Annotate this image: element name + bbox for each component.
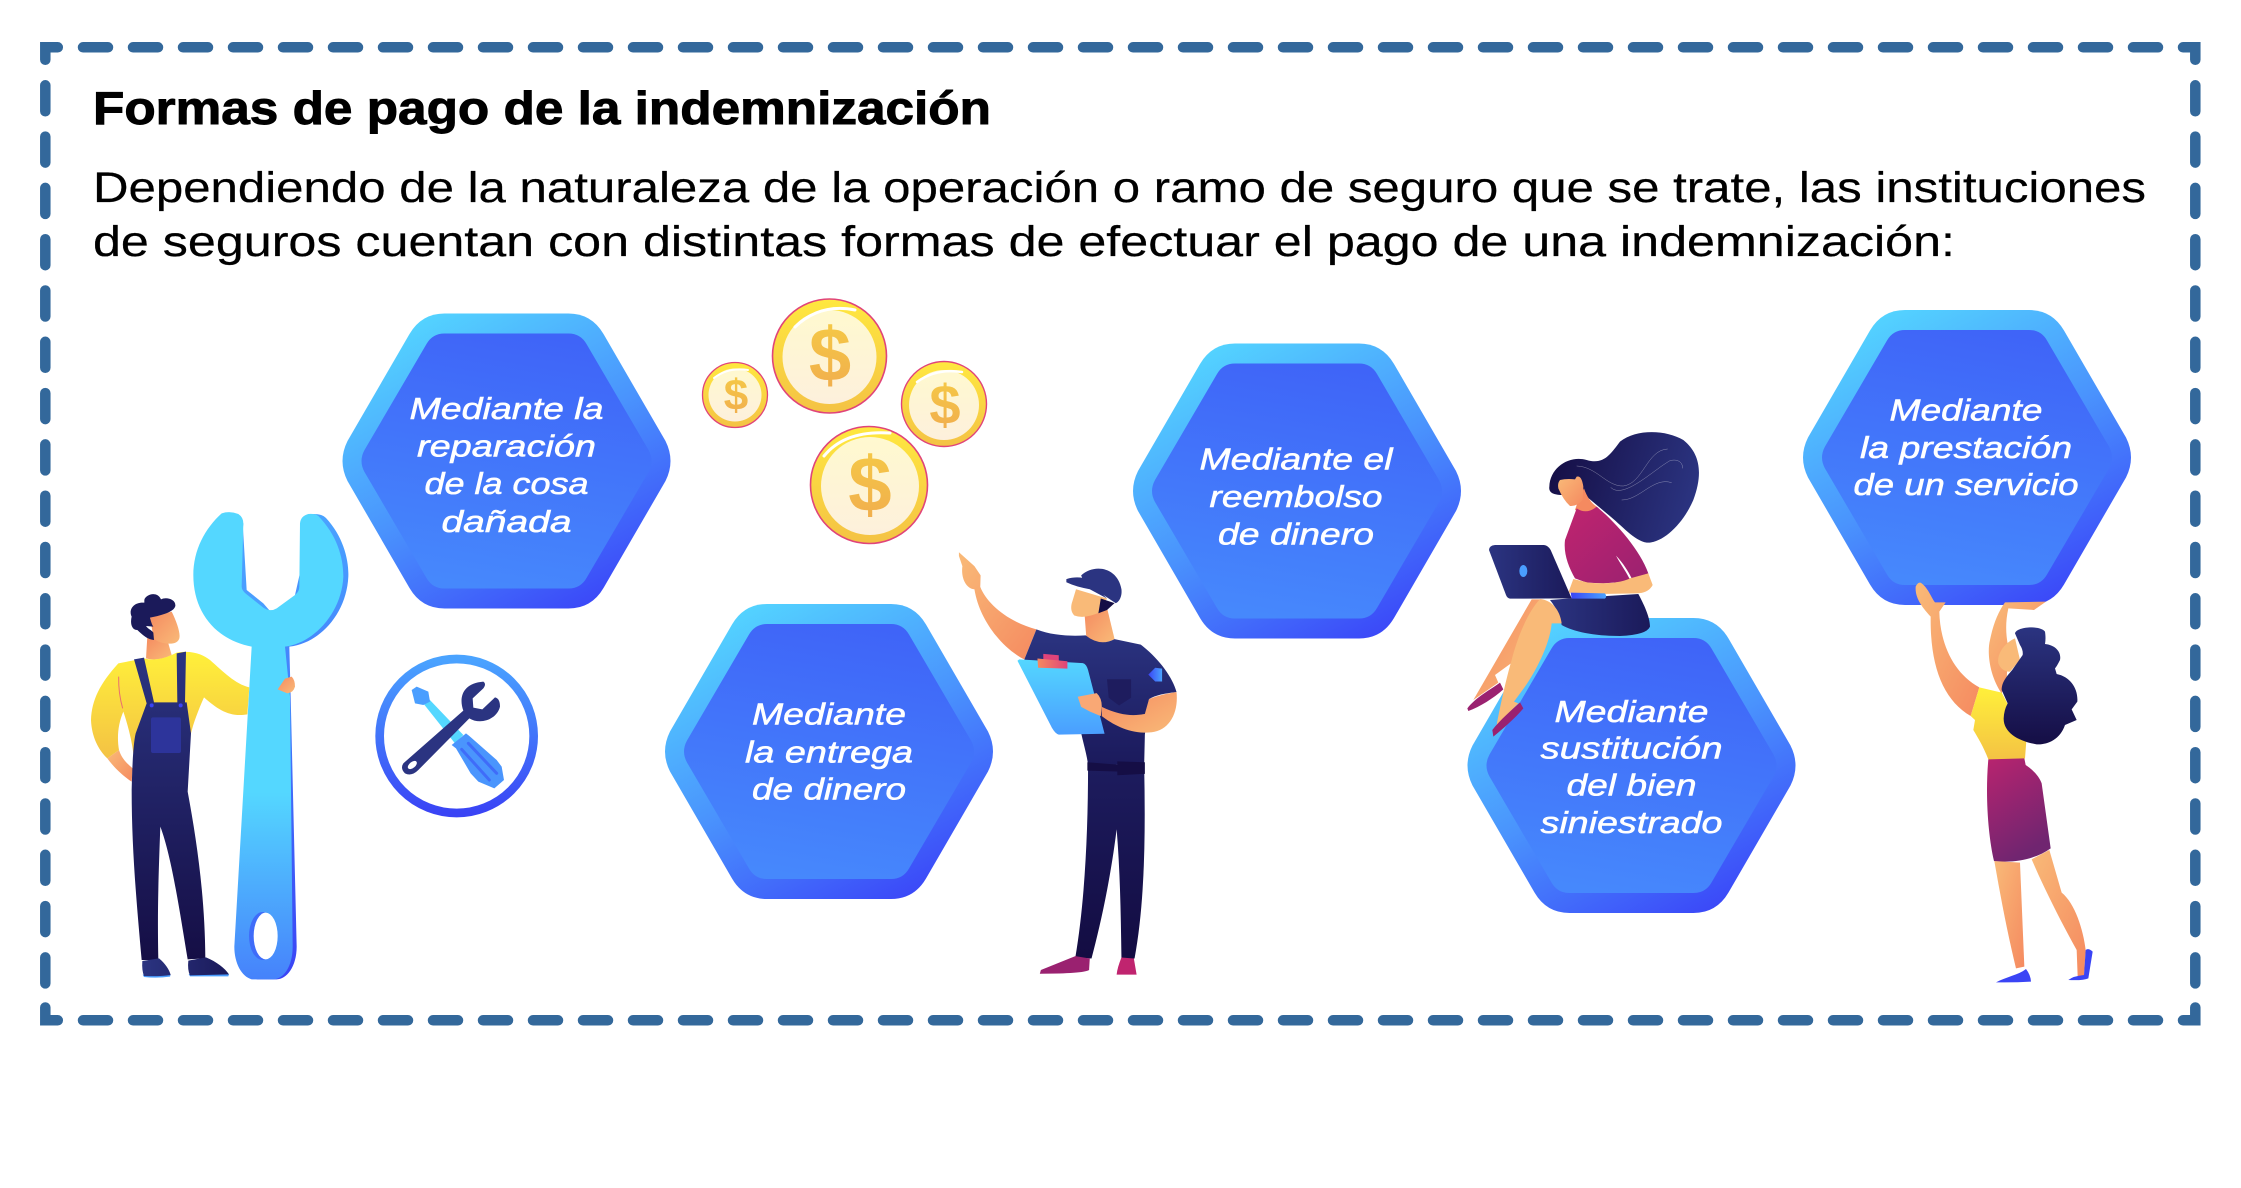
man forearm xyxy=(1102,692,1177,733)
legs xyxy=(1994,861,2024,968)
coin 3 xyxy=(902,362,986,446)
man hand xyxy=(1078,693,1102,716)
laptop xyxy=(1489,545,1572,599)
hexagon: reembolso xyxy=(1133,344,1461,638)
illustration: man with clipboard xyxy=(959,552,1177,975)
face xyxy=(1558,476,1583,506)
hexagon: prestación de un servicio: la prestación xyxy=(1860,430,2072,465)
arm xyxy=(1568,573,1653,594)
hexagon: sustitución: Mediante xyxy=(1554,694,1708,729)
clipboard xyxy=(1017,659,1105,735)
coin 1 xyxy=(772,299,886,413)
illustration: woman holding hexagon xyxy=(1916,583,2093,982)
worker hair xyxy=(131,594,175,640)
hexagon: entrega de dinero: de dinero xyxy=(752,772,906,806)
man neck xyxy=(1085,608,1115,643)
hexagon: entrega de dinero: la entrega xyxy=(745,734,913,770)
man cap xyxy=(1066,569,1122,603)
right arm xyxy=(1989,602,2046,693)
coin 4 xyxy=(810,426,928,544)
shirt xyxy=(1565,507,1648,583)
back leg xyxy=(1473,599,1540,700)
hexagon: reembolso: Mediante el xyxy=(1200,442,1394,476)
shoes xyxy=(1996,949,2093,982)
face xyxy=(1998,638,2020,672)
coin 3: $ xyxy=(929,373,961,436)
coin 2 xyxy=(702,362,768,428)
dashed border frame xyxy=(45,47,2195,1020)
shirt xyxy=(1971,687,2027,760)
coin 1: $ xyxy=(809,313,851,398)
hexagon: prestación de un servicio: Mediante xyxy=(1890,392,2042,428)
man arm pointing xyxy=(959,552,1036,659)
worker overalls xyxy=(132,652,205,960)
worker hand xyxy=(278,677,295,693)
worker shirt xyxy=(91,652,249,758)
man shoes xyxy=(1040,956,1090,974)
coin 2: $ xyxy=(724,371,748,420)
man pocket xyxy=(1107,679,1131,706)
man badge xyxy=(1148,668,1162,682)
hexagon: reembolso: de dinero xyxy=(1218,516,1374,552)
worker shoes xyxy=(143,974,229,978)
man face xyxy=(1071,589,1107,617)
worker neck xyxy=(146,637,172,659)
coin 4: $ xyxy=(848,440,892,528)
hexagon: reparación: dañada xyxy=(442,504,572,539)
hexagon: prestación de un servicio: de un servicio xyxy=(1854,467,2078,502)
intro text xyxy=(93,164,2146,266)
hexagon: sustitución xyxy=(1468,618,1796,913)
skirt xyxy=(1550,594,1650,636)
worker arm xyxy=(107,750,133,782)
man torso xyxy=(1024,629,1177,765)
skirt xyxy=(1987,758,2051,862)
hair xyxy=(1549,432,1699,543)
left arm xyxy=(1916,583,1979,716)
neck xyxy=(1575,488,1597,512)
hexagon: sustitución: sustitución xyxy=(1540,730,1722,766)
hair xyxy=(2002,627,2077,744)
man pants xyxy=(1075,767,1145,958)
hexagon: sustitución: siniestrado xyxy=(1540,805,1722,840)
front leg xyxy=(1497,599,1562,725)
hexagon: reparación: de la cosa xyxy=(424,466,589,501)
illustration: giant wrench xyxy=(193,512,348,979)
intro text: Dependiendo de la naturaleza de la operación o ramo de seguro que se trate, las instituciones xyxy=(93,164,2146,212)
illustration: worker in overalls xyxy=(91,594,295,978)
illustration: gold coins xyxy=(702,299,986,544)
hexagon: prestación de un servicio xyxy=(1803,310,2131,605)
man belt xyxy=(1087,761,1145,775)
hexagon: sustitución: del bien xyxy=(1566,768,1696,802)
hexagon: entrega de dinero: Mediante xyxy=(752,696,906,732)
illustration: woman with laptop xyxy=(1467,432,1699,737)
hexagon: reparación: Mediante la xyxy=(409,391,604,426)
hexagon: entrega de dinero xyxy=(665,604,993,899)
hexagon: reparación: reparación xyxy=(417,428,596,464)
shoes xyxy=(1467,683,1523,737)
title: Formas de pago de la indemnización xyxy=(93,82,991,134)
hexagon: reembolso: reembolso xyxy=(1210,479,1382,514)
icon: wrench and screwdriver xyxy=(380,659,534,813)
intro text: de seguros cuentan con distintas formas de efectuar el pago de una indemnización: xyxy=(93,218,1955,266)
hexagon: reparación xyxy=(342,314,670,608)
worker face xyxy=(150,612,180,644)
